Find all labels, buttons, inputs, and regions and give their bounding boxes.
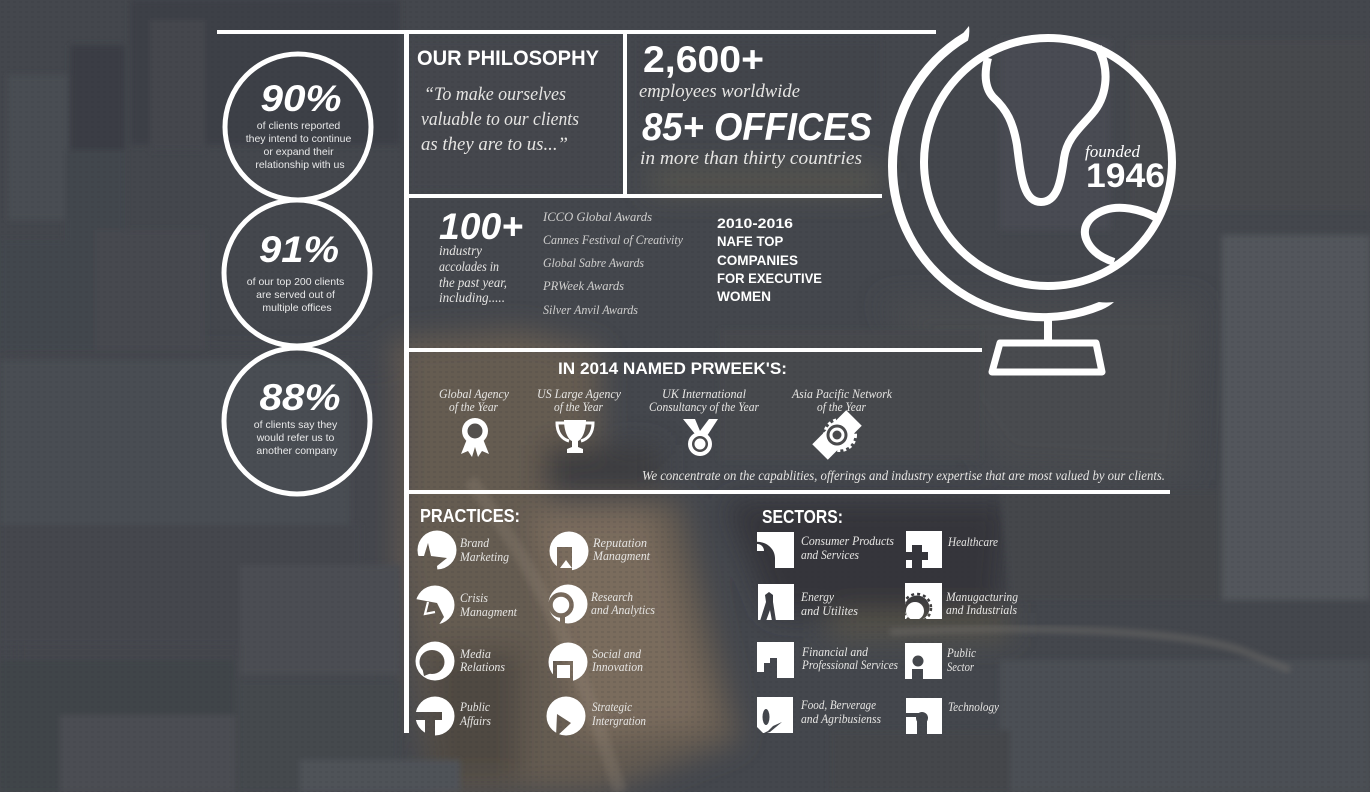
stat: 91%: are served out of: [256, 289, 335, 301]
NAFE callout: 2010-2016: [717, 215, 793, 231]
sector: healthcare: Healthcare: [947, 535, 998, 549]
award: UK international: UK International: [662, 386, 746, 401]
award: global agency: Global Agency: [439, 386, 509, 401]
stat: offices: 85+ OFFICES: [642, 106, 872, 149]
practice: brand marketing: Brand: [460, 536, 490, 550]
practice: research and analytics: [548, 584, 655, 624]
stat: 88%: another company: [256, 445, 338, 457]
practice: public affairs: Affairs: [459, 714, 491, 728]
sector: manufacturing: [905, 583, 1018, 619]
sector: healthcare: [906, 531, 998, 568]
NAFE callout: NAFE TOP: [717, 233, 783, 249]
award: US large agency: US Large Agency: [537, 386, 621, 401]
heading: practices: PRACTICES:: [420, 506, 520, 526]
sector: public sector: Public: [946, 646, 976, 660]
award: UK international: [649, 386, 760, 456]
stat: 88%: of clients say they: [254, 419, 338, 431]
NAFE callout: COMPANIES: [717, 252, 798, 268]
practice: strategic integration: [546, 696, 646, 736]
panel: client statistics circles: [224, 54, 371, 494]
awards list: ICCO Global Awards: [542, 209, 652, 224]
accolades description: industry: [439, 244, 483, 259]
sector: public sector: [905, 643, 976, 679]
stat: 90%: or expand their: [264, 146, 334, 158]
icon: globe: 1946: [1086, 157, 1165, 195]
stat: 91%: [224, 200, 370, 346]
sector: technology: [906, 698, 999, 734]
awards list: Global Sabre Awards: [543, 255, 644, 270]
practice: crisis management: Crisis: [460, 591, 488, 605]
practice: brand marketing: Marketing: [459, 550, 509, 564]
practice: research and analytics: Research: [590, 590, 633, 604]
sector: public sector: Sector: [947, 660, 974, 674]
stat: 90%: they intend to continue: [246, 133, 352, 145]
stat: 88%: [224, 348, 370, 494]
sector: food and beverage: and Agribusienss: [801, 712, 881, 726]
award: UK international: Consultancy of the Year: [649, 399, 760, 414]
stat: 90%: 90%: [260, 78, 342, 119]
stat: 91%: multiple offices: [262, 302, 332, 314]
sector: food and beverage: Food, Berverage: [800, 698, 876, 712]
icon: badge: [812, 410, 862, 460]
heading: PRWeek: IN 2014 NAMED PRWEEK'S:: [558, 359, 787, 378]
sector: financial: Professional Services: [801, 658, 898, 672]
practice: media relations: Media: [459, 647, 491, 661]
practice: social and innovation: Social and: [592, 647, 642, 661]
sector: consumer products: Consumer Products: [801, 534, 894, 548]
practice: crisis management: Managment: [459, 605, 517, 619]
icon: rosette: [461, 418, 489, 457]
sector: energy and utilities: [758, 584, 858, 620]
accolades description: including.....: [439, 291, 505, 306]
icon: medal: [683, 419, 718, 456]
capabilities statement: We concentrate on the capablities, offerings and industry expertise that are most valued by our clients.: [642, 469, 1165, 484]
sector: energy and utilities: Energy: [800, 590, 834, 604]
quote: as they are to us...”: [421, 134, 568, 155]
sector: manufacturing: and Industrials: [946, 603, 1017, 617]
panel: sectors: [757, 507, 1018, 734]
quote: valuable to our clients: [421, 109, 579, 130]
award: Asia Pacific: Asia Pacific Network: [791, 386, 892, 401]
sector: energy and utilities: and Utilites: [801, 604, 858, 618]
practice: reputation management: [550, 532, 650, 570]
heading: our philosophy: OUR PHILOSOPHY: [417, 47, 599, 70]
heading: sectors: SECTORS:: [762, 507, 843, 527]
award: Asia Pacific: [791, 386, 895, 460]
panel: employees and offices: in more than thirty countries: [640, 148, 862, 169]
practice: reputation management: Reputation: [592, 536, 647, 550]
award: global agency: [439, 386, 512, 457]
accolades description: the past year,: [439, 276, 507, 291]
practice: strategic integration: Strategic: [592, 700, 632, 714]
frame lines: [217, 30, 1170, 733]
panel: practices: [416, 506, 655, 736]
sector: financial: Financial and: [801, 645, 869, 659]
sector: consumer products: and Services: [801, 548, 859, 562]
practice: crisis management: [416, 586, 517, 624]
stat: 100+: 100+: [439, 206, 523, 247]
practice: social and innovation: [548, 642, 643, 682]
award: US large agency: of the Year: [554, 399, 604, 414]
awards list: Cannes Festival of Creativity: [543, 232, 683, 247]
practice: social and innovation: Innovation: [591, 660, 643, 674]
practice: media relations: [416, 642, 505, 680]
stat: 88%: 88%: [260, 377, 340, 418]
panel: employees and offices: [639, 39, 872, 169]
sector: financial: [757, 642, 898, 678]
panel: employees and offices: employees worldwide: [639, 81, 800, 102]
stat: 91%: 91%: [259, 229, 339, 270]
award: Asia Pacific: of the Year: [817, 399, 867, 414]
award: US large agency: [537, 386, 624, 453]
icon: trophy: [557, 420, 593, 453]
awards list: PRWeek Awards: [542, 278, 624, 293]
NAFE callout: FOR EXECUTIVE: [717, 270, 822, 286]
awards list: Silver Anvil Awards: [543, 302, 638, 317]
stat: 90%: [225, 54, 371, 200]
practice: media relations: Relations: [459, 660, 505, 674]
NAFE callout: WOMEN: [717, 288, 771, 304]
accolades description: accolades in: [439, 260, 499, 275]
panel: industry accolades: [439, 206, 826, 317]
award: global agency: of the Year: [449, 399, 499, 414]
founded label: founded: [1085, 142, 1140, 161]
icon: globe: [888, 26, 1172, 372]
stat: employees: 2,600+: [643, 39, 764, 80]
sector: manufacturing: Manugacturing: [945, 590, 1018, 604]
panel: our philosophy: [417, 47, 599, 155]
practice: public affairs: [416, 696, 491, 736]
quote: “To make ourselves: [424, 84, 566, 105]
stat: 90%: relationship with us: [255, 159, 345, 171]
sector: technology: Technology: [948, 700, 999, 714]
panel: PRWeek awards: [439, 359, 1165, 484]
practice: strategic integration: Intergration: [591, 714, 646, 728]
practice: reputation management: Managment: [592, 549, 650, 563]
sector: food and beverage: [757, 697, 881, 733]
stat: 90%: of clients reported: [257, 120, 340, 132]
sector: consumer products: [757, 532, 894, 568]
practice: public affairs: Public: [459, 700, 490, 714]
practice: research and analytics: and Analytics: [591, 603, 655, 617]
stat: 88%: would refer us to: [256, 432, 335, 444]
stat: 91%: of our top 200 clients: [247, 276, 344, 288]
practice: brand marketing: [418, 530, 509, 570]
